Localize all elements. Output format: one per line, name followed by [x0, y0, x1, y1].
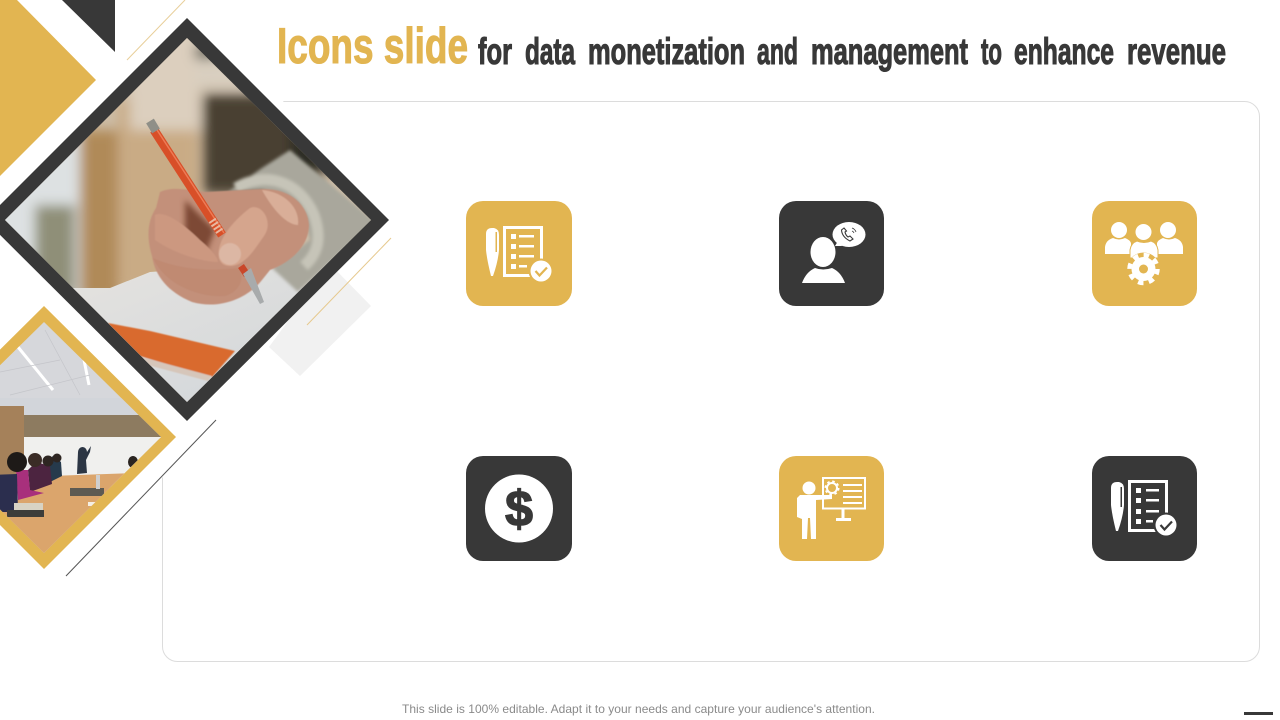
- icon: person with phone speech bubble (dark): [779, 201, 884, 306]
- small diamond frame: [0, 306, 176, 569]
- orange notebook: [108, 323, 235, 381]
- pen: [150, 121, 264, 304]
- grey diamond: [269, 264, 371, 376]
- large diamond frame: [0, 18, 389, 421]
- hand: [149, 189, 309, 305]
- icon: dollar coin (dark): [466, 456, 572, 561]
- seated people: [0, 452, 62, 512]
- presenter: [77, 446, 91, 474]
- title remainder: and: [757, 31, 798, 72]
- sweater: [228, 150, 375, 292]
- laptops: [7, 510, 44, 517]
- page marker: [1244, 712, 1273, 715]
- title remainder: for: [478, 31, 512, 72]
- title highlight: Icons slide: Icons slide: [277, 18, 468, 74]
- title remainder: [478, 31, 1226, 72]
- icon: checklist with pen (gold): [466, 201, 572, 306]
- whiteboard wall: [24, 437, 174, 487]
- ceiling grid: [0, 330, 90, 395]
- brown band: [22, 415, 172, 437]
- paper: [73, 260, 330, 402]
- icon: team with gear (gold): [1092, 201, 1197, 306]
- table: [3, 473, 124, 553]
- photo: hand writing with pen: [5, 38, 371, 402]
- gold corner diamond: [0, 0, 96, 176]
- panel mask behind diamonds: [150, 90, 400, 490]
- gold accent line right: [307, 238, 391, 325]
- icon: presenter with screen (gold): [779, 456, 884, 561]
- dark accent line: [66, 420, 216, 576]
- footer note: This slide is 100% editable. Adapt it to your needs and capture your audience's attention.: [402, 702, 875, 716]
- gold accent line top: [127, 0, 185, 60]
- seated person right: [128, 456, 138, 468]
- title remainder: revenue: [1127, 31, 1226, 72]
- title remainder: management: [811, 31, 968, 72]
- content panel: [162, 102, 1260, 662]
- photo: meeting room: [0, 322, 161, 553]
- ceiling lights: [18, 347, 53, 390]
- icon: dollar coin (dark): $: [505, 481, 533, 537]
- title remainder: to: [981, 31, 1002, 72]
- dark corner triangle: [62, 0, 115, 52]
- title: [277, 18, 1226, 74]
- icon: checklist with pen (dark): [1092, 456, 1197, 561]
- upper wall: [121, 398, 138, 415]
- title remainder: enhance: [1014, 31, 1114, 72]
- title remainder: monetization: [588, 31, 745, 72]
- title remainder: data: [525, 31, 575, 72]
